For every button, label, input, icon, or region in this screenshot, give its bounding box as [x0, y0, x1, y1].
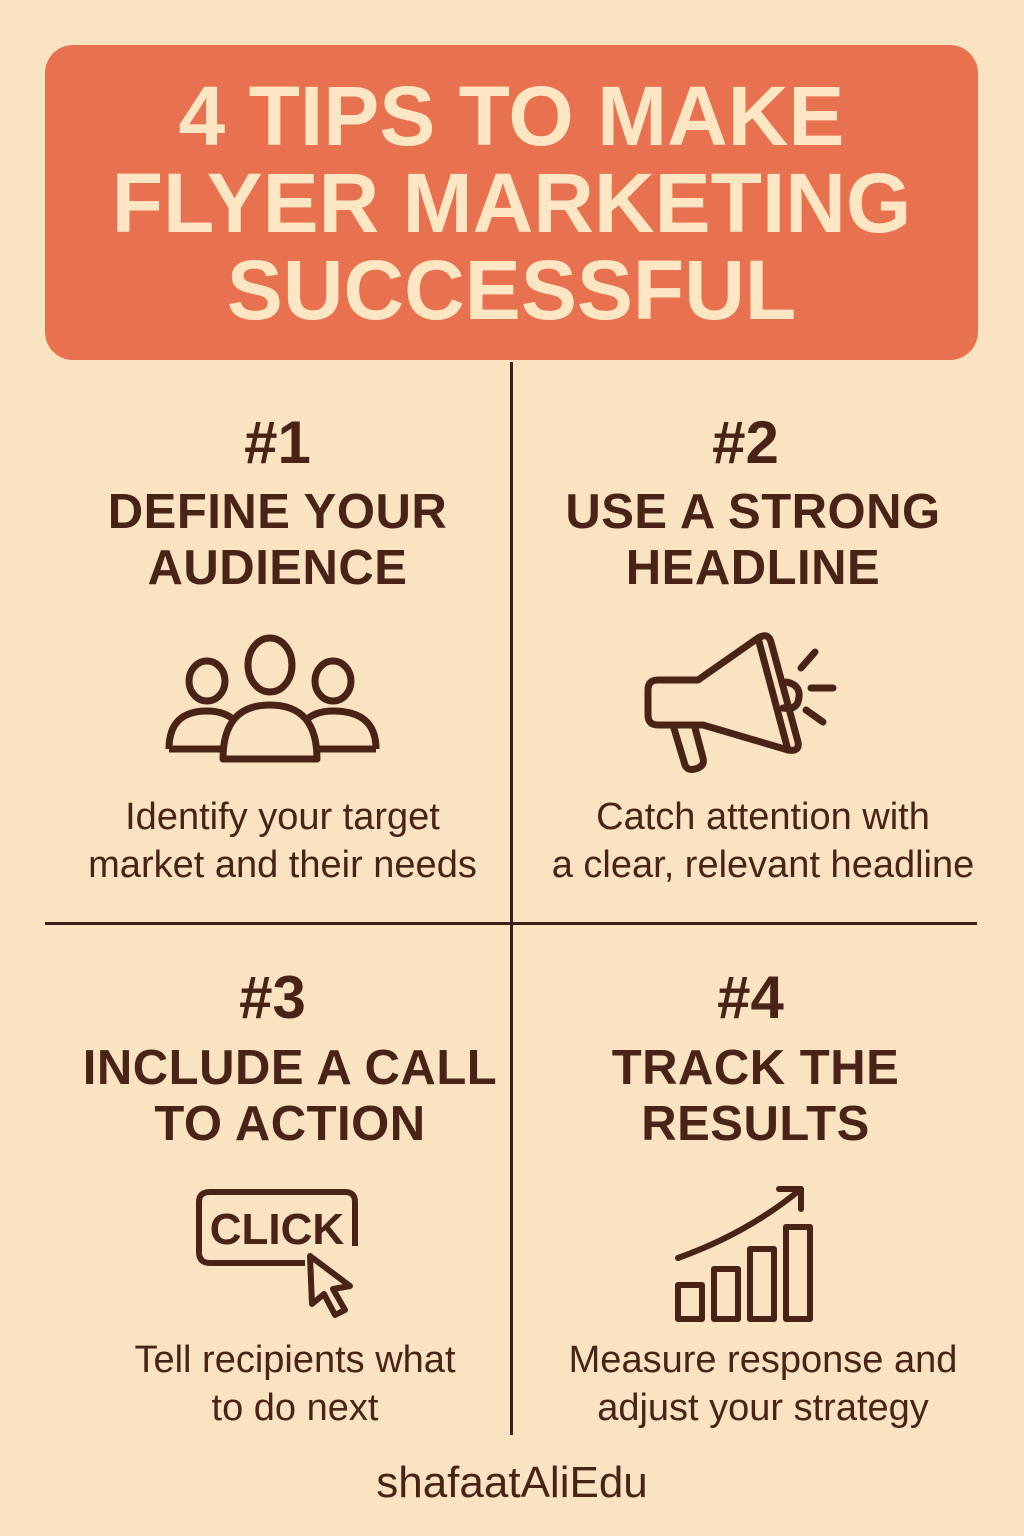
tip 3 heading: INCLUDE A CALL — [83, 1041, 497, 1095]
tip 4 description: Measure response and — [569, 1339, 957, 1381]
tip 1 description: Identify your target — [125, 796, 440, 838]
title: FLYER MARKETING — [112, 156, 911, 250]
panel: tip 1 — [88, 409, 477, 886]
tip 3 description — [134, 1339, 456, 1429]
icon: megaphone — [644, 632, 836, 773]
tip 2 heading: HEADLINE — [626, 541, 880, 595]
tip 4 description — [569, 1339, 957, 1429]
icon: growth chart — [675, 1186, 813, 1322]
icon: click button — [196, 1189, 358, 1318]
tip 3 description: to do next — [212, 1387, 378, 1429]
panel: tip 2 — [552, 409, 974, 886]
tip 4 heading — [612, 1041, 899, 1151]
footer credit: shafaatAliEdu — [376, 1458, 648, 1507]
tip 2 description — [552, 796, 974, 886]
tip 3 description: Tell recipients what — [134, 1339, 456, 1381]
tip 1 heading — [108, 485, 447, 595]
panel: tip 4 — [569, 964, 957, 1429]
icon: audience — [166, 634, 380, 762]
tip 3 number: #3 — [239, 964, 306, 1031]
tip 2 description: Catch attention with — [596, 796, 930, 838]
title banner — [45, 45, 978, 360]
tip 1 number: #1 — [244, 409, 311, 476]
tip 2 heading: USE A STRONG — [565, 485, 941, 539]
tip 4 heading: TRACK THE — [612, 1041, 899, 1095]
tip 1 description — [88, 796, 477, 886]
tip 1 heading: AUDIENCE — [148, 541, 407, 595]
panel: tip 3 — [83, 964, 497, 1429]
tip 3 heading: TO ACTION — [154, 1097, 426, 1151]
tip 2 heading — [565, 485, 941, 595]
icon: click button: CLICK — [210, 1205, 344, 1254]
tip 4 description: adjust your strategy — [597, 1387, 929, 1429]
tip 3 heading — [83, 1041, 497, 1151]
tip 4 number: #4 — [717, 964, 784, 1031]
tip 2 description: a clear, relevant headline — [552, 844, 974, 886]
tip 2 number: #2 — [712, 409, 779, 476]
title: SUCCESSFUL — [227, 243, 796, 337]
title: 4 TIPS TO MAKE — [179, 69, 844, 163]
tip 4 heading: RESULTS — [641, 1097, 870, 1151]
tip 1 heading: DEFINE YOUR — [108, 485, 447, 539]
title — [112, 69, 911, 337]
tip 1 description: market and their needs — [88, 844, 477, 886]
